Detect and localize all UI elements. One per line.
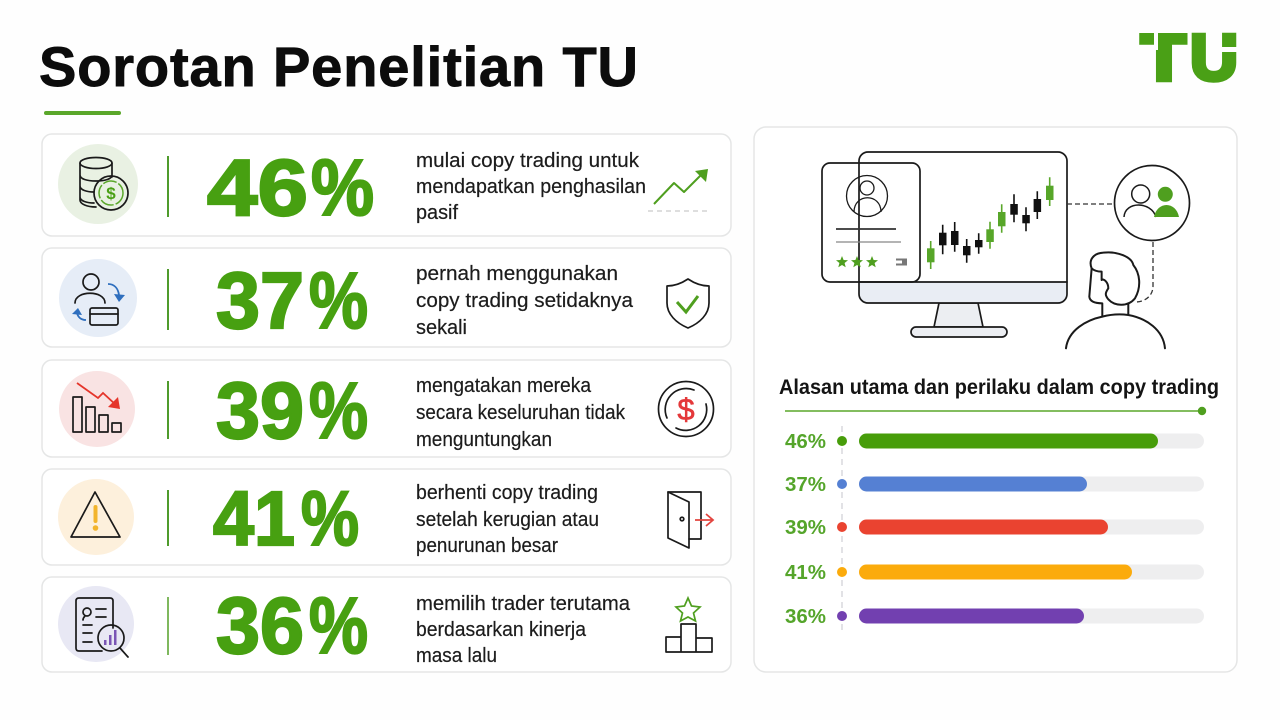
- divider: [167, 381, 169, 439]
- description: memilih trader terutama: [416, 593, 631, 615]
- icon: exit door: [668, 492, 713, 548]
- bar: 36%: 36%: [785, 606, 826, 628]
- stat: 39%: 39: [216, 366, 304, 455]
- description: penurunan besar: [416, 535, 558, 557]
- bar: 36%: [785, 606, 1204, 628]
- description: berhenti copy trading: [416, 482, 598, 504]
- logo: TU: [1141, 21, 1240, 94]
- description: mendapatkan penghasilan: [416, 176, 646, 198]
- icon: user and card exchange: [59, 259, 137, 337]
- description: mulai copy trading untuk: [416, 150, 640, 172]
- stat: 37%: %: [309, 256, 368, 345]
- description: [416, 263, 634, 339]
- logo: TU: T: [1141, 21, 1187, 94]
- heading rule: [785, 407, 1206, 415]
- trader profile card: [822, 163, 920, 282]
- description: secara keseluruhan tidak: [416, 402, 626, 424]
- stat: 41%: 41: [213, 476, 295, 562]
- illustration: trader at monitor: [822, 152, 1190, 348]
- stat: 46%: %: [311, 143, 374, 232]
- stat: 36%: %: [309, 581, 368, 670]
- description: pernah menggunakan: [416, 263, 618, 285]
- stat: 39%: %: [309, 366, 368, 455]
- description: sekali: [416, 317, 467, 339]
- divider: [167, 490, 169, 546]
- bar: 39%: [785, 517, 1204, 539]
- title underline: [44, 111, 121, 115]
- icon: dollar coin: [658, 382, 714, 436]
- stat: 46%: 46: [207, 143, 308, 232]
- icon: shield check: [667, 279, 709, 328]
- icon: falling bar chart: [59, 371, 135, 447]
- title: Sorotan Penelitian TU: [39, 35, 638, 98]
- description: pasif: [416, 202, 458, 224]
- monitor: [859, 152, 1067, 337]
- description: menguntungkan: [416, 429, 552, 451]
- panel: right summary: [754, 127, 1237, 672]
- icon: podium with star: [666, 598, 712, 652]
- panel: row 41%: [42, 469, 731, 565]
- divider: [167, 156, 169, 217]
- description: masa lalu: [416, 645, 497, 667]
- dashed connector: [1067, 204, 1153, 302]
- logo: TU: U: [1190, 21, 1238, 94]
- bar: 37%: 37%: [785, 474, 826, 496]
- panel: row 39%: [42, 360, 731, 457]
- stat: 36%: 36: [216, 581, 304, 670]
- description: mengatakan mereka: [416, 375, 592, 397]
- description: [416, 150, 646, 224]
- description: setelah kerugian atau: [416, 509, 599, 531]
- chart heading: Alasan utama dan perilaku dalam copy trading: [779, 376, 1219, 399]
- illustration: person silhouette: [1066, 252, 1165, 348]
- description: copy trading setidaknya: [416, 290, 634, 312]
- panel: row 36%: [42, 577, 731, 672]
- bar: 37%: [785, 474, 1204, 496]
- bar: 46%: [785, 431, 1204, 453]
- icon: dollar coin: $: [677, 392, 695, 427]
- icon: copy trader circle: [1114, 166, 1190, 240]
- stat: 41%: %: [301, 476, 359, 562]
- candlestick chart: [927, 177, 1054, 269]
- icon: warning triangle: [58, 479, 134, 555]
- icon: coins: [58, 144, 138, 224]
- bar: 39%: 39%: [785, 517, 826, 539]
- panel: row 46%: [42, 134, 731, 236]
- divider: [167, 269, 169, 330]
- description: [416, 593, 631, 667]
- panel: row 37%: [42, 248, 731, 347]
- description: berdasarkan kinerja: [416, 619, 587, 641]
- icon: report with magnifier: [58, 586, 134, 662]
- icon: coins: $: [106, 184, 116, 203]
- bar chart: [785, 426, 1204, 630]
- stat: 37%: 37: [216, 256, 304, 345]
- bar: 41%: 41%: [785, 562, 826, 584]
- bar: 41%: [785, 562, 1204, 584]
- description: [416, 375, 626, 451]
- description: [416, 482, 599, 557]
- divider: [167, 597, 169, 655]
- icon: growth arrow: [648, 169, 710, 211]
- bar: 46%: 46%: [785, 431, 826, 453]
